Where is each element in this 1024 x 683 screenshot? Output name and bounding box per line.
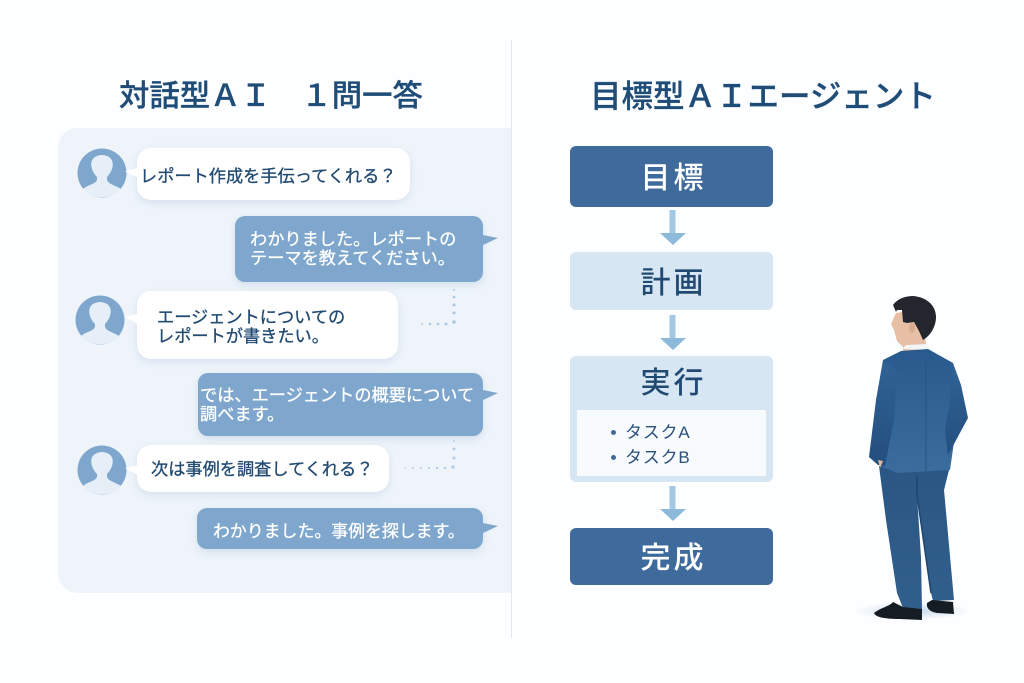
right sleeve — [945, 363, 968, 455]
message 5: user — [137, 445, 389, 492]
arrow: goal to plan — [660, 210, 686, 245]
message 5: user: 次は事例を調査してくれる？ — [151, 459, 373, 479]
jacket body — [880, 349, 960, 473]
icon: user avatar 3 — [78, 446, 126, 494]
arrow: execute to complete — [660, 486, 686, 521]
message 2: AI — [235, 216, 483, 282]
hair — [893, 296, 936, 340]
flow step: goal — [570, 146, 773, 207]
flow step: goal: 目標 — [640, 162, 706, 195]
flow step: complete: 完成 — [640, 542, 706, 575]
arrow: plan to execute — [660, 315, 686, 350]
task B: タスクB — [625, 448, 691, 467]
message 6: AI — [197, 508, 483, 549]
trousers — [879, 466, 954, 609]
shirt collar — [902, 344, 930, 350]
title: conversational AI: 対話型ＡＩ １問一答 — [119, 79, 423, 113]
decorative dots upper — [421, 289, 456, 326]
message 1: user — [137, 148, 410, 200]
title: goal-oriented AI agent: 目標型ＡＩエージェント — [590, 78, 936, 114]
decorative dots lower — [404, 440, 456, 470]
flow step: plan — [570, 252, 773, 310]
back seam — [925, 360, 927, 472]
left panel background — [58, 128, 511, 593]
task A: タスクA — [625, 423, 691, 442]
floor shadow — [854, 602, 970, 620]
hand — [878, 460, 883, 468]
message 3: user: レポートが書きたい。 — [157, 326, 329, 346]
center divider — [511, 40, 512, 638]
flow step: execute with task list — [570, 356, 773, 482]
left sleeve — [869, 360, 897, 466]
shoes — [874, 602, 922, 620]
flow step: plan: 計画 — [640, 267, 706, 300]
message 3: user: エージェントについての — [157, 307, 345, 327]
message 3: user — [137, 291, 398, 359]
flow step: complete — [570, 528, 773, 585]
message 2: AI: わかりました。レポートの — [250, 229, 456, 249]
task list — [577, 410, 766, 476]
neck and face — [891, 310, 927, 352]
message 2: AI: テーマを教えてください。 — [250, 248, 455, 268]
message 1: user: レポート作成を手伝ってくれる？ — [140, 166, 396, 186]
execute label: 実行 — [640, 367, 706, 400]
ear — [909, 323, 915, 333]
message 4: AI: では、エージェントの概要について — [200, 385, 474, 405]
icon: user avatar 1 — [78, 148, 126, 198]
message 6: AI: わかりました。事例を探します。 — [213, 522, 465, 541]
message 4: AI: 調べます。 — [200, 404, 284, 424]
icon: user avatar 2 — [76, 296, 124, 344]
message 4: AI — [198, 373, 483, 436]
